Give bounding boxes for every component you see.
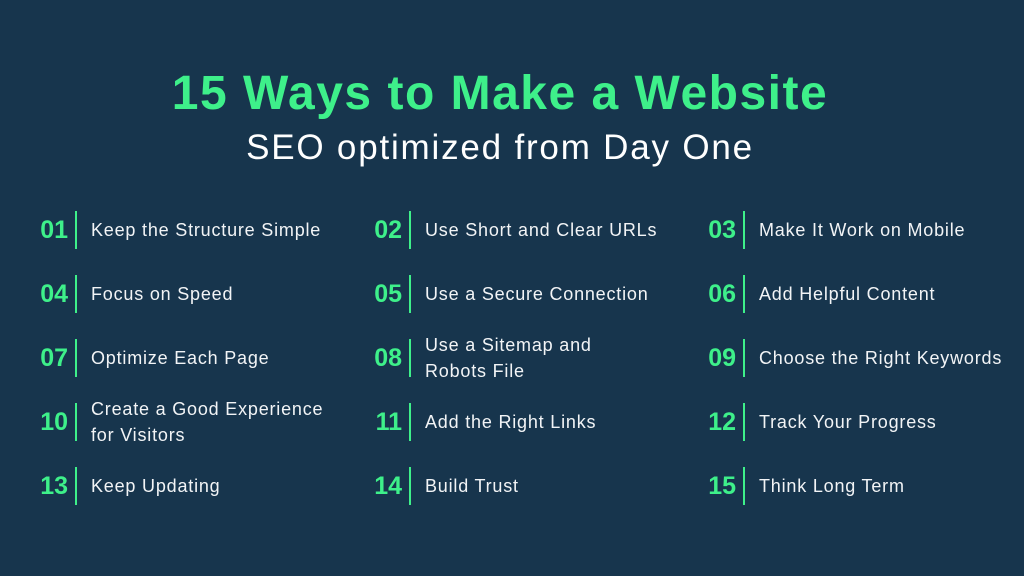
item 05: Use a Secure Connection — [425, 284, 649, 304]
item 05 — [374, 275, 649, 313]
item 10 — [40, 399, 323, 445]
item 15 — [708, 467, 905, 505]
item 03: Make It Work on Mobile — [759, 220, 965, 240]
item 08 — [374, 335, 592, 381]
item 07: Optimize Each Page — [91, 348, 269, 368]
subtitle: SEO optimized from Day One — [246, 128, 754, 167]
item 10: for Visitors — [91, 425, 185, 445]
item 02: 02 — [374, 216, 402, 244]
item 01: 01 — [40, 216, 68, 244]
item 02: Use Short and Clear URLs — [425, 220, 657, 240]
item 13: Keep Updating — [91, 476, 220, 496]
item 10: 10 — [40, 408, 68, 436]
item 04: Focus on Speed — [91, 284, 233, 304]
item 06: 06 — [708, 280, 736, 308]
item 05: 05 — [374, 280, 402, 308]
item 12: 12 — [708, 408, 736, 436]
item 12 — [708, 403, 937, 441]
title: 15 Ways to Make a Website — [172, 67, 828, 120]
item 09: 09 — [708, 344, 736, 372]
item 02 — [374, 211, 657, 249]
item 10: Create a Good Experience — [91, 399, 323, 419]
item 04: 04 — [40, 280, 68, 308]
item 13: 13 — [40, 472, 68, 500]
item 09 — [708, 339, 1002, 377]
item 14: 14 — [374, 472, 402, 500]
item 03: 03 — [708, 216, 736, 244]
item 08: Robots File — [425, 361, 525, 381]
item 04 — [40, 275, 233, 313]
item 13 — [40, 467, 220, 505]
item 14 — [374, 467, 519, 505]
item 01 — [40, 211, 321, 249]
item 15: 15 — [708, 472, 736, 500]
item 07: 07 — [40, 344, 68, 372]
item 14: Build Trust — [425, 476, 519, 496]
item 06 — [708, 275, 935, 313]
item 08: Use a Sitemap and — [425, 335, 592, 355]
item 08: 08 — [374, 344, 402, 372]
item 06: Add Helpful Content — [759, 284, 935, 304]
item 15: Think Long Term — [759, 476, 905, 496]
item 11 — [376, 403, 596, 441]
item 12: Track Your Progress — [759, 412, 937, 432]
item 07 — [40, 339, 269, 377]
item 09: Choose the Right Keywords — [759, 348, 1002, 368]
item 01: Keep the Structure Simple — [91, 220, 321, 240]
item 11: Add the Right Links — [425, 412, 596, 432]
item 03 — [708, 211, 965, 249]
item 11: 11 — [376, 408, 402, 436]
